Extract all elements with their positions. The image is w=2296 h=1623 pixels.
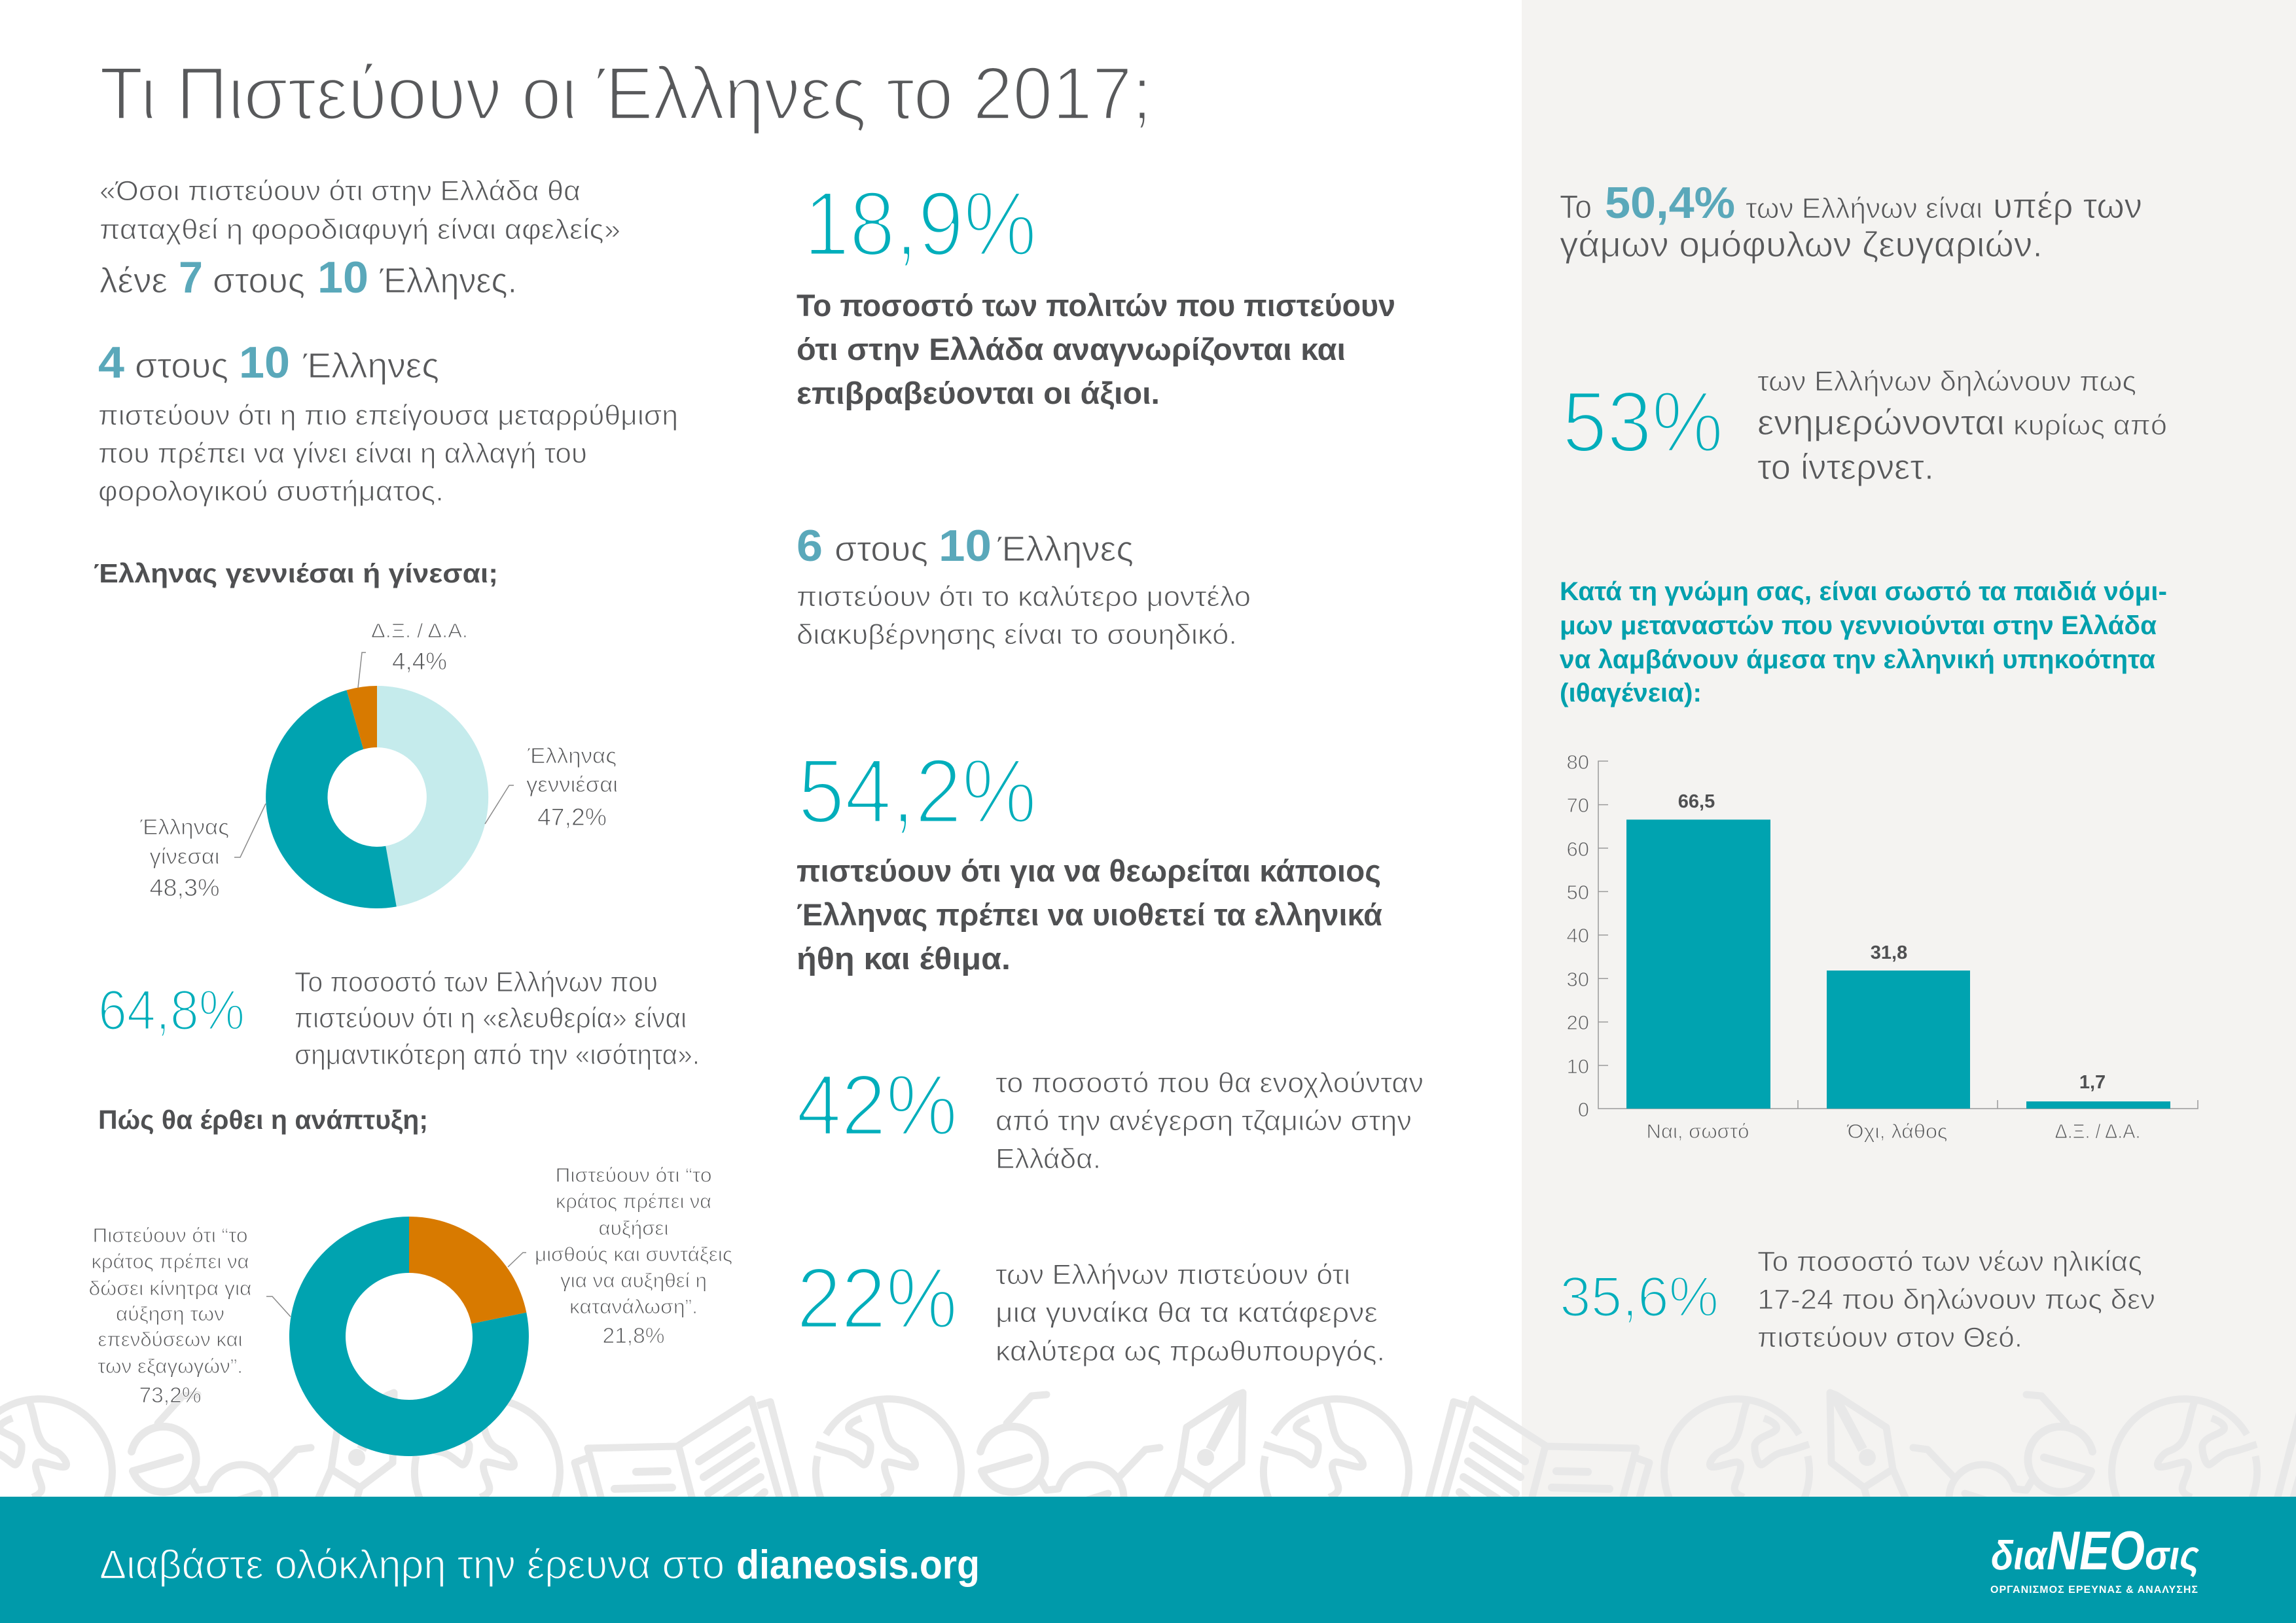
donut chart: how growth will come: κατανάλωση”. [569, 1295, 698, 1318]
stat: 50,4% same-sex marriage: γάμων ομόφυλων ζευγαριών. [1560, 225, 2043, 264]
heading: citizenship question: Κατά τη γνώμη σας, είναι σωστό τα παιδιά νόμι- [1560, 577, 2167, 606]
stat: 53% informed via internet: το ίντερνετ. [1757, 448, 1934, 487]
text block: tax evasion quote [99, 175, 620, 302]
stat: 18,9%: Το ποσοστό των πολιτών που πιστεύουν [797, 288, 1395, 323]
heading: citizenship question: να λαμβάνουν άμεσα την ελληνική υπηκοότητα [1560, 645, 2155, 674]
text block: 4 in 10 tax reform: φορολογικού συστήματος. [98, 476, 444, 507]
text block: 4 in 10 tax reform: Έλληνες [302, 346, 439, 385]
donut chart: how growth will come: Πιστεύουν ότι “το [555, 1164, 712, 1186]
stat: 54,2%: πιστεύουν ότι για να θεωρείται κάποιος [797, 853, 1381, 888]
bar chart: citizenship: 70 [1567, 794, 1589, 817]
donut chart: how growth will come: 73,2% [139, 1383, 202, 1407]
heading: citizenship question: (ιθαγένεια): [1560, 679, 1702, 707]
stat: 18,9% [797, 172, 1395, 410]
background icon pattern [0, 1393, 2296, 1544]
stat: 53% informed via internet: 53% [1562, 374, 1723, 470]
text block: 6 in 10 Swedish model: Έλληνες [997, 529, 1134, 569]
text block: 6 in 10 Swedish model [797, 521, 1251, 651]
donut chart: how growth will come: κράτος πρέπει να [92, 1250, 249, 1273]
bar chart: citizenship: Ναι, σωστό [1647, 1120, 1749, 1143]
stat: 22% woman prime minister: των Ελλήνων πιστεύουν ότι [996, 1259, 1350, 1291]
donut chart: born or become Greek: γεννιέσαι [526, 772, 618, 796]
text block: 6 in 10 Swedish model: διακυβέρνησης είναι το σουηδικό. [797, 619, 1237, 651]
stat: 42% mosques: 42% [797, 1057, 958, 1153]
text block: tax evasion quote: «Όσοι πιστεύουν ότι στην Ελλάδα θα [99, 175, 581, 207]
footer call to action: dianeosis.org [736, 1543, 980, 1588]
donut chart: born or become Greek: Έλληνας [527, 743, 617, 768]
text block: tax evasion quote: παταχθεί η φοροδιαφυγή είναι αφελείς» [99, 214, 620, 245]
stat: 53% informed via internet: κυρίως από [2013, 410, 2167, 441]
text block: 4 in 10 tax reform: στους [135, 346, 228, 385]
stat: 64,8% freedom over equality [98, 967, 700, 1071]
text block: 4 in 10 tax reform: 10 [239, 338, 290, 387]
heading: born or become Greek: Έλληνας γεννιέσαι ή γίνεσαι; [94, 558, 498, 588]
stat: 50,4% same-sex marriage [1560, 178, 2142, 264]
stat: 18,9%: επιβραβεύονται οι άξιοι. [797, 376, 1160, 410]
text block: 6 in 10 Swedish model: 6 [797, 521, 823, 571]
donut chart: born or become Greek: Δ.Ξ. / Δ.Α. [371, 619, 468, 642]
text block: tax evasion quote: λένε [99, 261, 168, 300]
heading: citizenship question [1560, 577, 2167, 707]
bar chart: citizenship: Όχι, λάθος [1846, 1120, 1948, 1143]
stat: 35,6% young people: πιστεύουν στον Θεό. [1757, 1322, 2022, 1353]
donut chart: how growth will come: επενδύσεων και [98, 1328, 243, 1351]
text block: 6 in 10 Swedish model: πιστεύουν ότι το καλύτερο μοντέλο [797, 581, 1251, 613]
heading: citizenship question: μων μεταναστών που γεννιούνται στην Ελλάδα [1560, 611, 2157, 640]
footer call to action: Διαβάστε ολόκληρη την έρευνα στο [99, 1543, 725, 1588]
stat: 50,4% same-sex marriage: Το [1560, 188, 1592, 225]
bar chart: citizenship: 30 [1567, 968, 1589, 991]
donut chart: how growth will come: για να αυξηθεί η [560, 1269, 707, 1292]
panel: right column background [1522, 0, 2296, 1497]
donut chart: born or become Greek: 4,4% [392, 648, 447, 675]
bar chart: citizenship: 31,8 [1871, 942, 1907, 963]
stat: 54,2% [797, 740, 1382, 976]
donut chart: born or become Greek: 47,2% [537, 804, 607, 830]
text block: 6 in 10 Swedish model: στους [834, 529, 928, 569]
stat: 54,2%: ήθη και έθιμα. [797, 941, 1011, 976]
text block: tax evasion quote: Έλληνες. [379, 261, 517, 300]
logo: diaNEOsis: ΟΡΓΑΝΙΣΜΟΣ ΕΡΕΥΝΑΣ & ΑΝΑΛΥΣΗΣ [1990, 1584, 2198, 1596]
donut chart: born or become Greek [139, 619, 618, 908]
logo: diaNEOsis [1990, 1520, 2199, 1596]
donut chart: born or become Greek: Έλληνας [139, 815, 229, 839]
stat: 18,9%: ότι στην Ελλάδα αναγνωρίζονται και [797, 332, 1346, 366]
stat: 42% mosques: από την ανέγερση τζαμιών στην [996, 1105, 1412, 1137]
stat: 64,8% freedom over equality: σημαντικότερη από την «ισότητα». [295, 1039, 700, 1071]
stat: 22% woman prime minister: μια γυναίκα θα τα κατάφερνε [996, 1297, 1378, 1329]
donut chart: how growth will come: μισθούς και συντάξεις [535, 1243, 732, 1266]
stat: 50,4% same-sex marriage: 50,4% [1605, 178, 1735, 228]
donut chart: how growth will come: αυξήσει [598, 1217, 669, 1240]
stat: 35,6% young people [1560, 1246, 2155, 1353]
donut chart: how growth will come: Πιστεύουν ότι “το [93, 1224, 247, 1247]
bar chart: citizenship: 10 [1567, 1055, 1589, 1078]
bar chart: citizenship: 40 [1567, 924, 1589, 947]
bar chart: citizenship: 20 [1567, 1011, 1589, 1034]
text block: 4 in 10 tax reform: 4 [98, 338, 124, 387]
text block: 4 in 10 tax reform [98, 338, 678, 507]
bar chart: citizenship: 66,5 [1678, 791, 1715, 812]
stat: 53% informed via internet [1562, 366, 2167, 487]
donut chart: how growth will come: κράτος πρέπει να [556, 1190, 711, 1213]
bar chart: citizenship [1567, 751, 2198, 1143]
stat: 42% mosques: Ελλάδα. [996, 1143, 1101, 1175]
donut chart: born or become Greek: 48,3% [149, 874, 220, 901]
stat: 35,6% young people: 35,6% [1560, 1266, 1719, 1329]
stat: 35,6% young people: Το ποσοστό των νέων ηλικίας [1757, 1246, 2142, 1277]
stat: 42% mosques [797, 1057, 1424, 1175]
bar chart: citizenship: Δ.Ξ. / Δ.Α. [2055, 1120, 2140, 1143]
donut chart: how growth will come: 21,8% [602, 1323, 665, 1347]
donut chart: how growth will come [89, 1164, 732, 1456]
bar chart: citizenship: 50 [1567, 881, 1589, 904]
stat: 54,2%: 54,2% [798, 740, 1037, 842]
donut chart: born or become Greek: γίνεσαι [149, 844, 220, 868]
bar chart: citizenship: 1,7 [2079, 1072, 2106, 1093]
stat: 22% woman prime minister: καλύτερα ως πρωθυπουργός. [996, 1336, 1385, 1367]
stat: 42% mosques: το ποσοστό που θα ενοχλούνταν [996, 1067, 1424, 1099]
logo: diaNEOsis: δια [1991, 1533, 2048, 1578]
text block: tax evasion quote: 10 [317, 253, 368, 302]
stat: 18,9%: 18,9% [804, 172, 1037, 275]
stat: 53% informed via internet: ενημερώνονται [1757, 403, 2005, 442]
text block: 6 in 10 Swedish model: 10 [939, 521, 992, 571]
footer bar [0, 1497, 2296, 1623]
stat: 22% woman prime minister [797, 1250, 1385, 1367]
bar chart: citizenship: 60 [1567, 838, 1589, 861]
stat: 50,4% same-sex marriage: υπέρ των [1993, 187, 2142, 226]
bar chart: citizenship: 0 [1578, 1098, 1589, 1121]
stat: 35,6% young people: 17-24 που δηλώνουν πως δεν [1757, 1284, 2155, 1315]
stat: 64,8% freedom over equality: 64,8% [98, 979, 245, 1042]
stat: 53% informed via internet: των Ελλήνων δηλώνουν πως [1757, 366, 2136, 397]
title: Τι Πιστεύουν οι Έλληνες το 2017; [99, 52, 1152, 135]
bar chart: citizenship: 80 [1567, 751, 1589, 774]
stat: 64,8% freedom over equality: Το ποσοστό των Ελλήνων που [295, 967, 658, 998]
stat: 50,4% same-sex marriage: των Ελλήνων είναι [1746, 192, 1982, 224]
stat: 64,8% freedom over equality: πιστεύουν ότι η «ελευθερία» είναι [295, 1003, 687, 1034]
logo: diaNEOsis: σις [2145, 1533, 2199, 1578]
stat: 22% woman prime minister: 22% [797, 1250, 958, 1346]
text block: 4 in 10 tax reform: πιστεύουν ότι η πιο επείγουσα μεταρρύθμιση [98, 400, 678, 431]
heading: how growth will come: Πώς θα έρθει η ανάπτυξη; [98, 1105, 428, 1135]
text block: tax evasion quote: 7 [179, 253, 203, 302]
text block: tax evasion quote: στους [213, 261, 305, 300]
donut chart: how growth will come: των εξαγωγών”. [98, 1355, 243, 1378]
logo: diaNEOsis: ΝΕΟ [2047, 1520, 2145, 1581]
donut chart: how growth will come: δώσει κίνητρα για [89, 1277, 252, 1300]
text block: 4 in 10 tax reform: που πρέπει να γίνει είναι η αλλαγή του [98, 438, 587, 469]
stat: 54,2%: Έλληνας πρέπει να υιοθετεί τα ελληνικά [797, 897, 1382, 932]
donut chart: how growth will come: αύξηση των [116, 1302, 224, 1325]
